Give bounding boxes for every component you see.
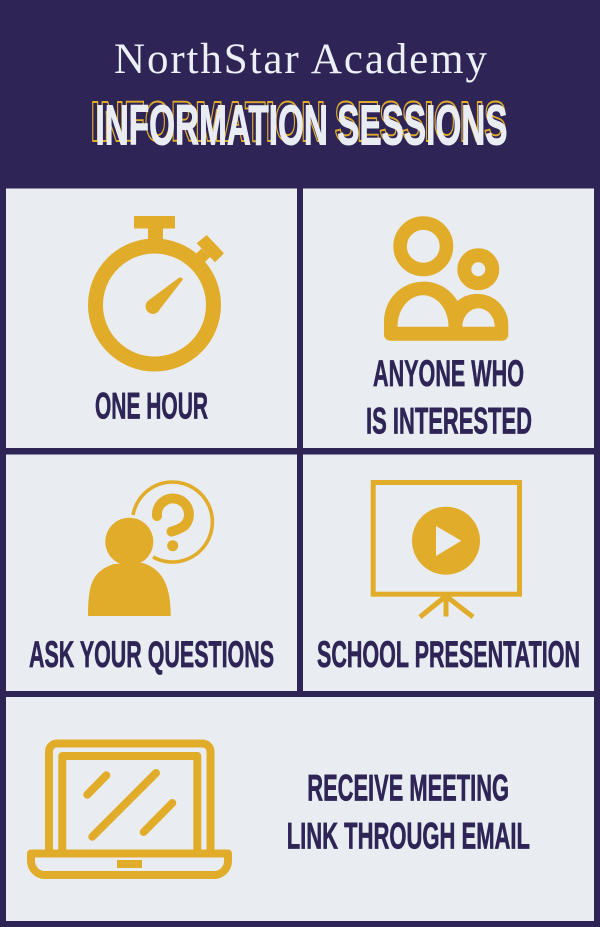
icon: person with question: [88, 482, 212, 616]
title: NorthStar Academy: NorthStar Academy: [114, 36, 488, 83]
label: one hour: ONE HOUR: [95, 386, 208, 426]
panel: school presentation: [303, 454, 594, 691]
label: ask your questions: ASK YOUR QUESTIONS: [29, 634, 274, 675]
panel: one hour: [6, 188, 297, 448]
label: receive meeting link through email: [287, 768, 530, 856]
icon: stopwatch: [96, 216, 224, 364]
panel: anyone who is interested: [303, 188, 594, 448]
panel: ask your questions: [6, 454, 297, 691]
icon: presentation screen: [373, 482, 520, 617]
icon: people: [384, 223, 508, 341]
label: anyone who is interested: [366, 353, 532, 441]
icon: laptop: [31, 744, 228, 875]
panel: receive meeting link: [6, 697, 594, 921]
